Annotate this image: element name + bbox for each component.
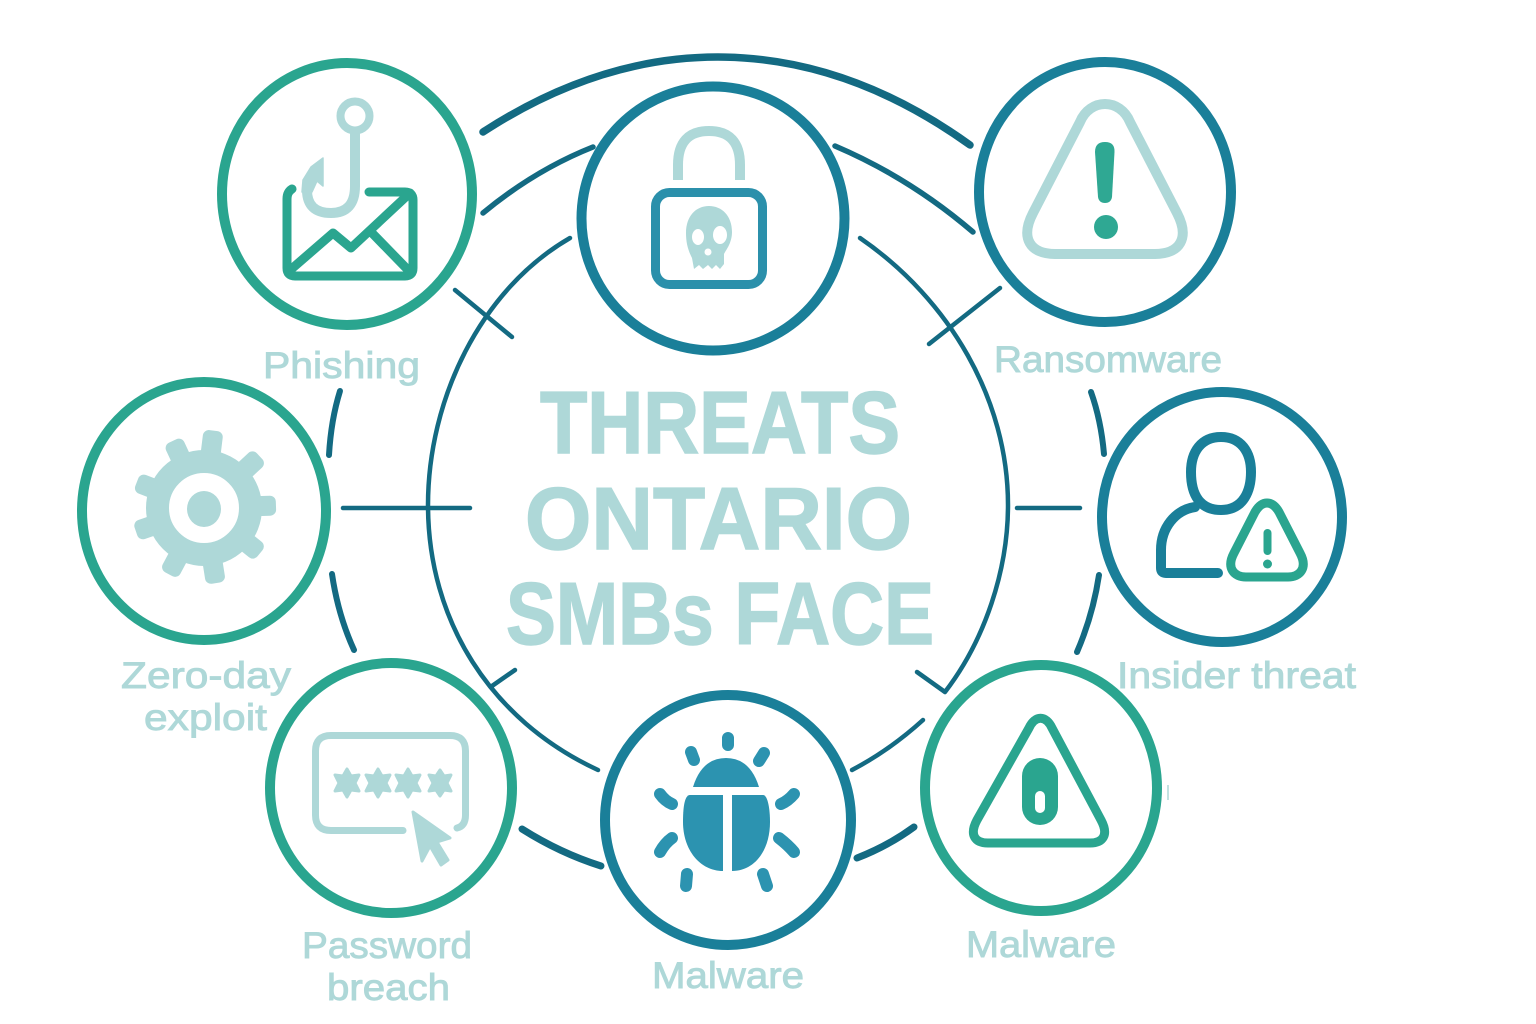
node: ransomware lock (582, 86, 844, 350)
title: SMBs FACE (506, 564, 934, 663)
node: phishing (222, 63, 472, 386)
label: Malware: Malware (652, 955, 804, 996)
node: malware bug (605, 695, 851, 996)
label: Zero-day exploit: Zero-day (121, 655, 292, 696)
icon: hook and envelope (287, 102, 413, 276)
icon: bug (660, 738, 794, 886)
connector lines and arcs (329, 57, 1168, 866)
label: Password breach: Password (302, 925, 472, 966)
node: password breach (270, 663, 512, 1008)
title (506, 373, 934, 663)
label: Zero-day exploit: exploit (144, 697, 268, 738)
icon: warning triangle with keyhole (973, 718, 1105, 843)
icon: gear (133, 429, 276, 585)
node: malware warning (925, 665, 1157, 965)
title: THREATS (540, 373, 900, 472)
label: Insider threat: Insider threat (1117, 655, 1357, 696)
icon: padlock with skull (656, 131, 762, 284)
label: Password breach (302, 925, 472, 1008)
icon: person with warning (1161, 437, 1303, 577)
label: Phishing: Phishing (263, 345, 420, 386)
icon: warning triangle (1027, 104, 1183, 254)
icon: password field and cursor (316, 736, 466, 865)
title: ONTARIO (525, 469, 912, 568)
label: Ransomware: Ransomware (994, 339, 1222, 380)
node: ransomware warning (979, 62, 1231, 380)
node: insider threat (1102, 392, 1357, 696)
label: Malware: Malware (966, 924, 1116, 965)
label: Password breach: breach (327, 967, 450, 1008)
label: Zero-day exploit (121, 655, 292, 738)
node: zero-day exploit (82, 382, 326, 738)
